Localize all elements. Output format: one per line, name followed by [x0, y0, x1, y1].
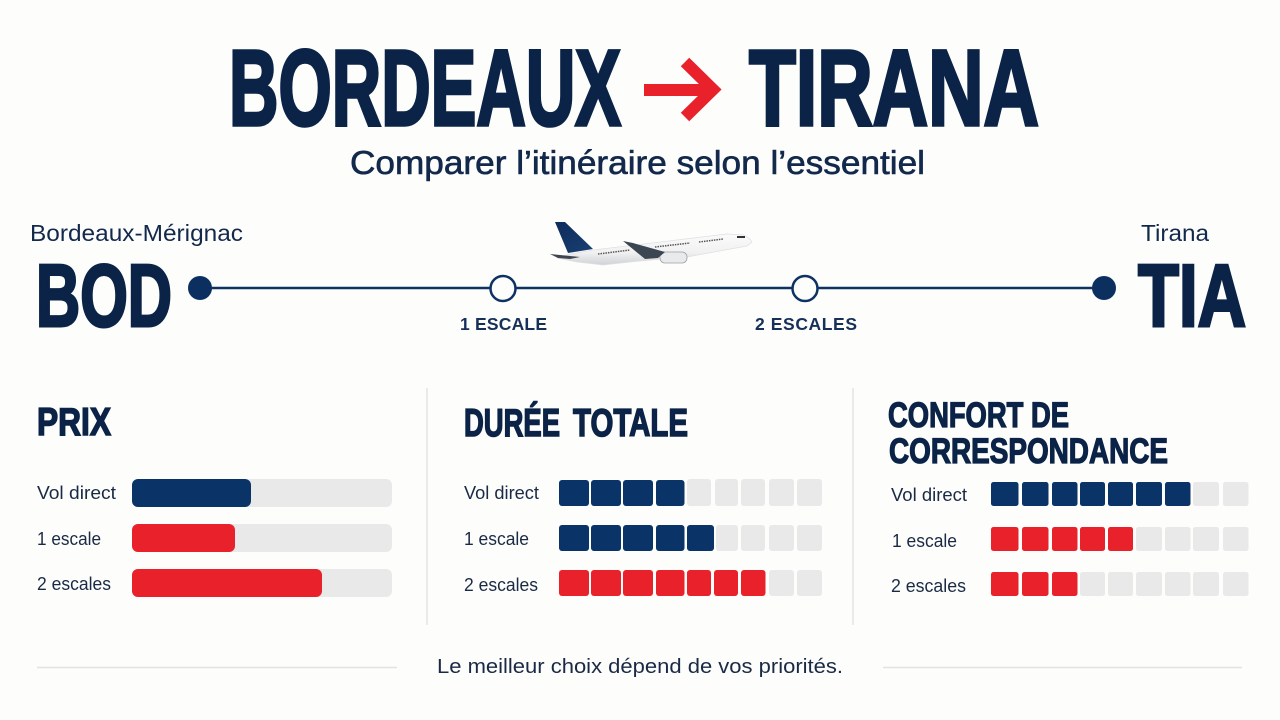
bar: vol direct: Vol direct: [37, 482, 116, 503]
icon: airplane: [550, 222, 752, 265]
segments: 1 escale: [892, 527, 1248, 551]
heading: durée totale: TOTALE: [573, 402, 688, 445]
stop: 1 escale: 1 ESCALE: [460, 314, 547, 334]
bar: vol direct: [37, 479, 392, 507]
departure airport: Bordeaux-Mérignac: [30, 220, 243, 246]
segments: 2 escales: [891, 572, 1248, 596]
title: BORDEAUX: [229, 27, 621, 148]
route timeline: [30, 220, 1246, 345]
segments: 2 escales: 2 escales: [891, 575, 966, 596]
heading: confort de correspondance: CONFORT DE: [888, 396, 1069, 435]
heading: confort de correspondance: [888, 396, 1168, 471]
bar: 2 escales: [37, 569, 392, 597]
origin dot: [188, 276, 212, 300]
panel: durée totale: [464, 401, 822, 596]
divider: [426, 388, 428, 625]
panel: prix: [37, 401, 392, 597]
stop: 2 escales: 2 ESCALES: [755, 314, 857, 334]
segments: vol direct: [464, 479, 822, 506]
icon: red arrow: [644, 62, 713, 117]
bar: 2 escales: 2 escales: [37, 573, 111, 594]
footer text: Le meilleur choix dépend de vos priorités.: [437, 656, 843, 678]
heading: confort de correspondance: CORRESPONDANCE: [889, 432, 1168, 471]
segments: vol direct: Vol direct: [464, 482, 539, 503]
segments: vol direct: [891, 482, 1248, 506]
departure airport: BOD: [36, 246, 172, 345]
heading: prix: PRIX: [37, 401, 111, 444]
title: TIRANA: [749, 27, 1039, 148]
segments: vol direct: Vol direct: [891, 484, 967, 505]
divider: [852, 388, 854, 625]
segments: 2 escales: [464, 570, 822, 596]
segments: 2 escales: 2 escales: [464, 574, 538, 595]
bar: 1 escale: 1 escale: [37, 528, 101, 549]
destination dot: [1092, 276, 1116, 300]
subtitle: Comparer l’itinéraire selon l’essentiel: [350, 144, 925, 181]
arrival airport: Tirana: [1141, 220, 1209, 246]
panel: confort de correspondance: [888, 396, 1248, 596]
stop: 2 escales: [755, 276, 857, 334]
heading: durée totale: [464, 401, 688, 445]
stop: 1 escale: [460, 276, 547, 334]
route line: [200, 287, 1104, 289]
segments: 1 escale: 1 escale: [892, 530, 957, 551]
arrival airport: [1138, 220, 1246, 345]
heading: durée totale: DURÉE: [464, 401, 560, 445]
bar: 1 escale: [37, 524, 392, 552]
segments: 1 escale: 1 escale: [464, 528, 529, 549]
arrival airport: TIA: [1138, 246, 1246, 345]
segments: 1 escale: [464, 525, 822, 551]
